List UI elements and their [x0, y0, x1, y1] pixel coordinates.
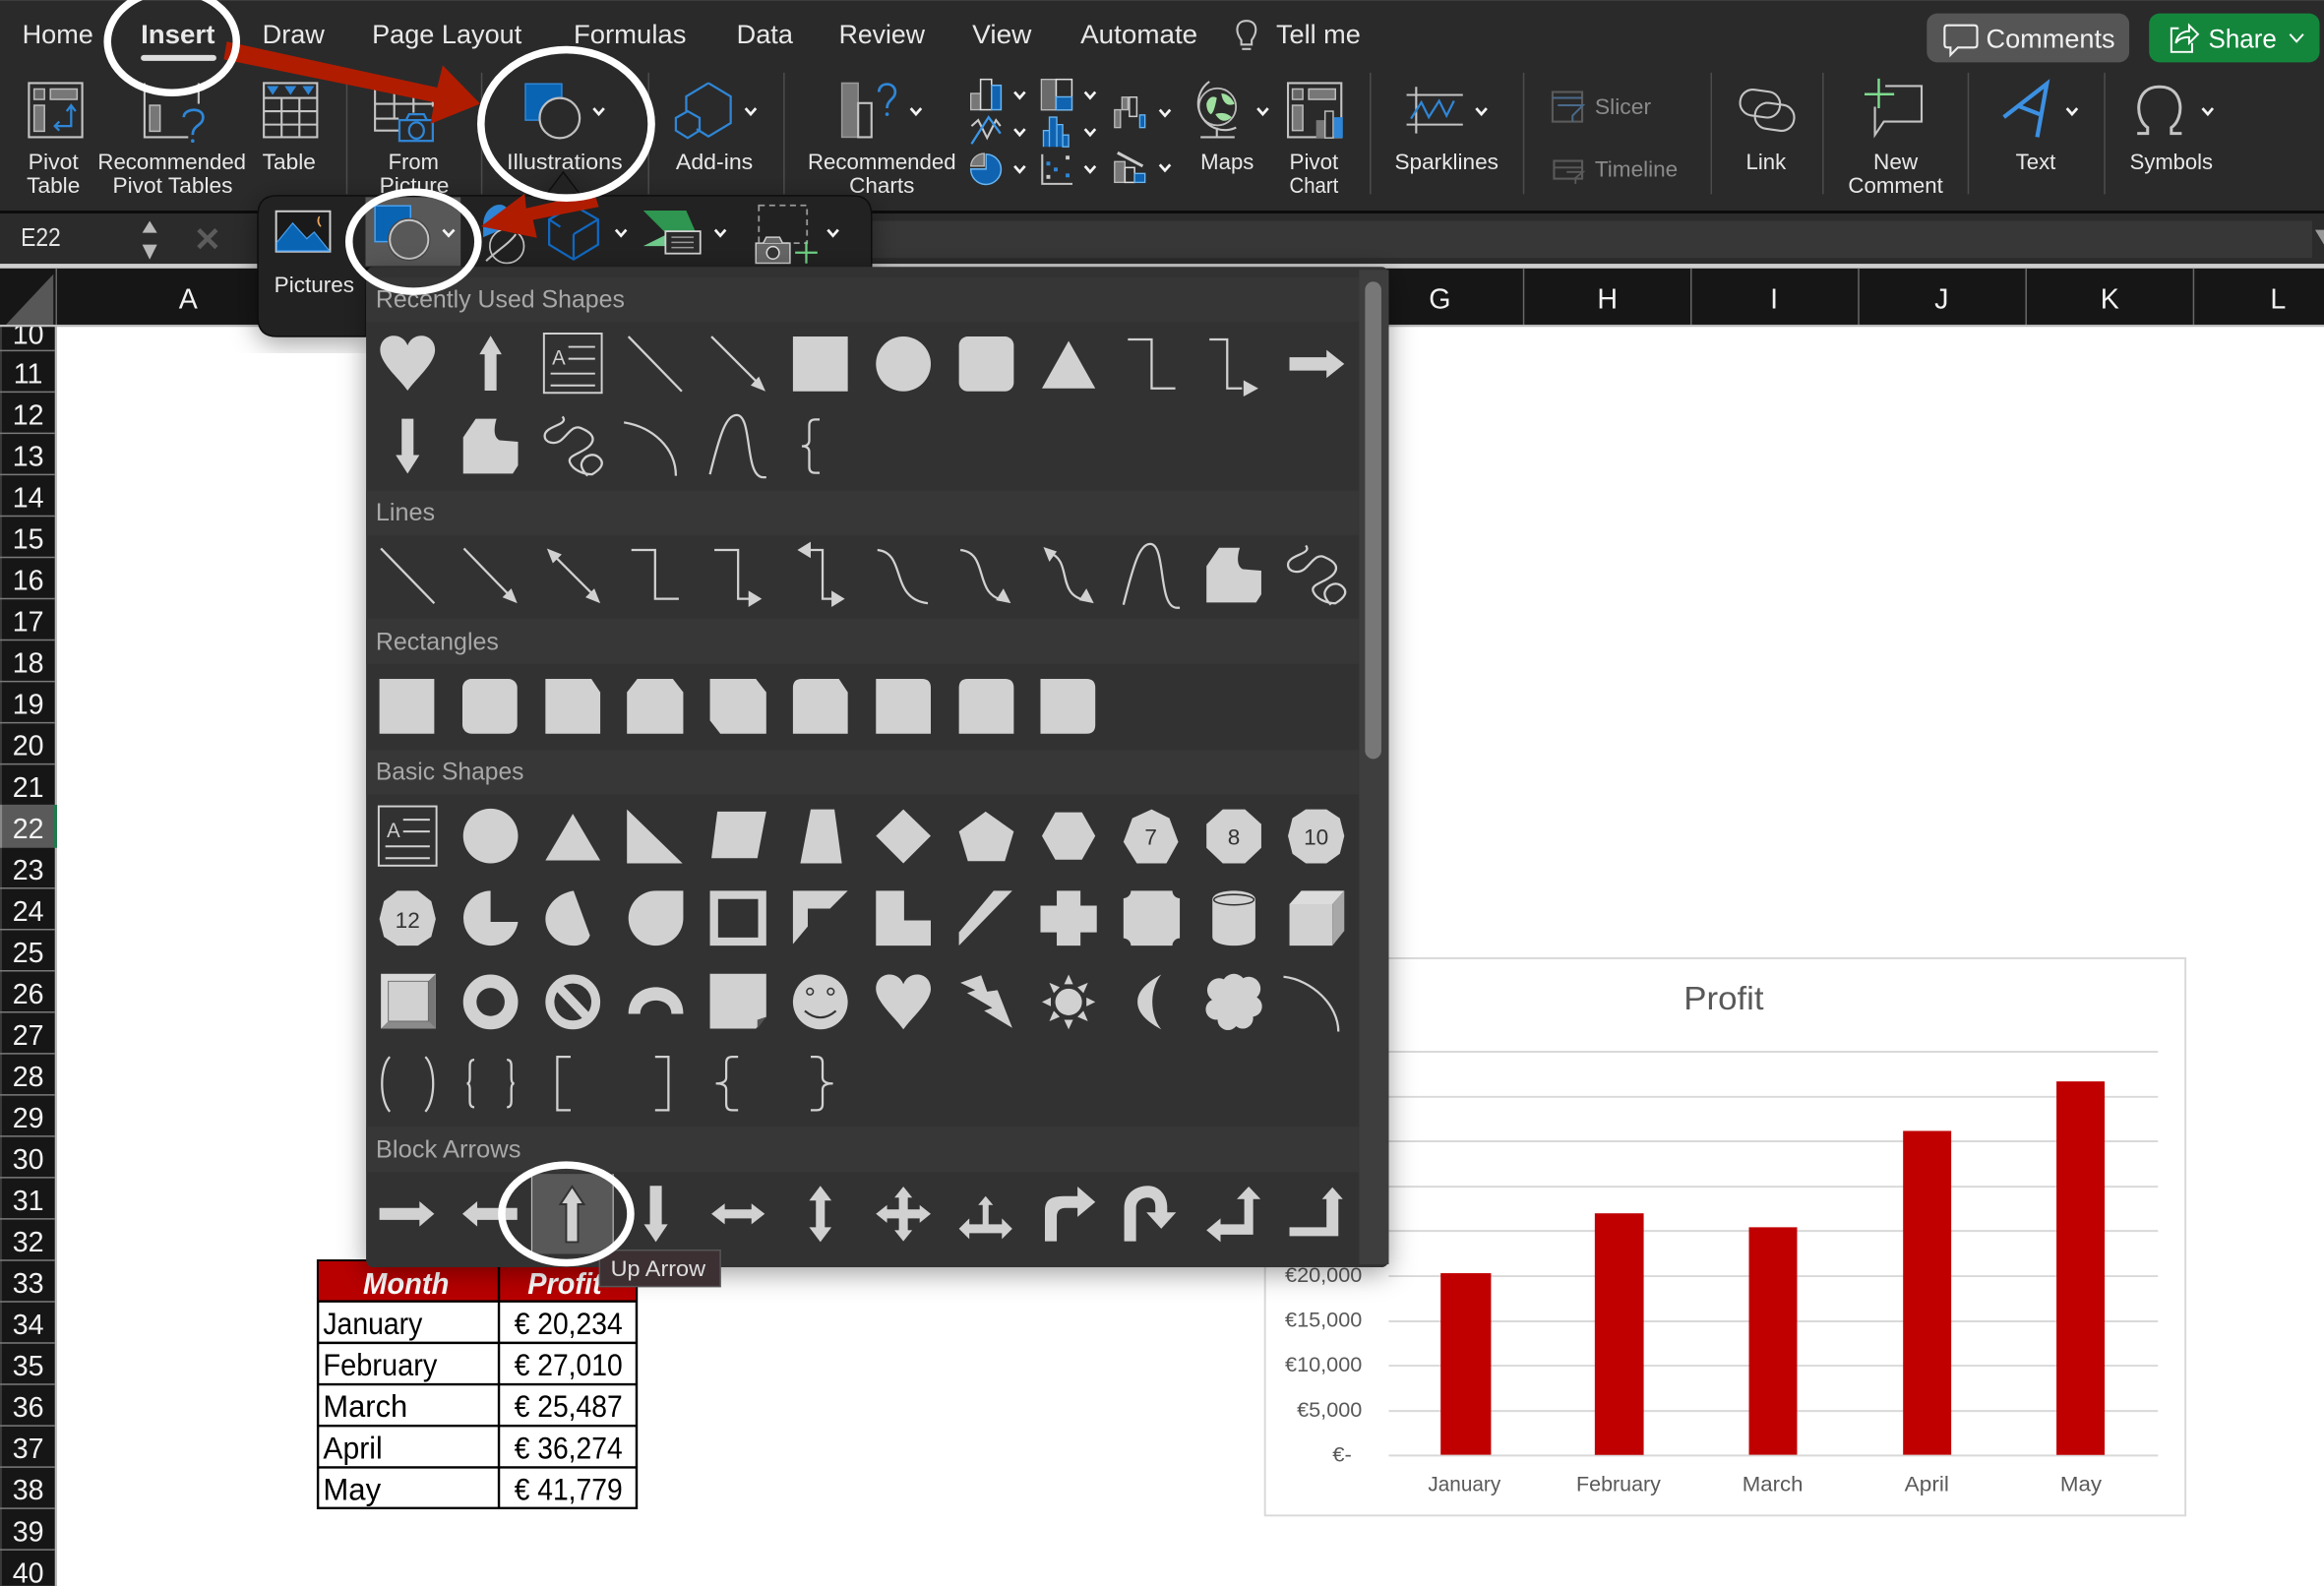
- column header row: G: [1429, 283, 1451, 315]
- row number header: 20: [13, 731, 44, 762]
- callout ring: insert tab: [107, 0, 236, 92]
- comments button: Comments: [1987, 23, 2115, 53]
- label: new comment: [1848, 150, 1943, 198]
- row number header: 29: [13, 1103, 44, 1134]
- callout ring: illustrations: [481, 50, 651, 198]
- icon: link: [1739, 88, 1796, 133]
- y-axis labels: €10,000: [1285, 1354, 1362, 1376]
- shape row: basic 1: 7: [1144, 825, 1157, 850]
- row number header: 34: [13, 1310, 44, 1341]
- heading: block arrows: Block Arrows: [376, 1137, 520, 1164]
- label: from picture: Picture: [380, 173, 449, 198]
- shape row: basic 1: A: [387, 820, 401, 842]
- icon: table: [264, 83, 317, 137]
- label: pivot chart: Chart: [1290, 173, 1338, 198]
- row number header: 23: [13, 855, 44, 886]
- data table: month and profit: Month: [363, 1268, 449, 1301]
- label: new comment: New: [1873, 150, 1918, 174]
- row number header: 35: [13, 1351, 44, 1382]
- data table: month and profit: € 27,010: [515, 1347, 623, 1382]
- share button: [2149, 14, 2319, 62]
- label: text: Text: [2016, 150, 2055, 174]
- row number header: 15: [13, 524, 44, 556]
- column header row: [0, 269, 2324, 327]
- ribbon tabs: Insert: [141, 20, 215, 49]
- label: pivot table: Table: [27, 173, 80, 198]
- chart title: Profit: [1683, 981, 1764, 1017]
- icon and label: timeline: Timeline: [1595, 156, 1678, 181]
- row number header: 28: [13, 1062, 44, 1093]
- row number header: 13: [13, 442, 44, 473]
- label: pivot chart: Pivot: [1290, 150, 1338, 174]
- shape row: basic 1: 10: [1304, 825, 1328, 850]
- icon: 3D models: [549, 206, 626, 260]
- row number header: 36: [13, 1392, 44, 1424]
- heading: basic shapes: Basic Shapes: [376, 759, 524, 785]
- shape row: basic 1: 8: [1228, 825, 1240, 850]
- row number header: 10: [13, 320, 44, 351]
- column header row: A: [179, 283, 199, 315]
- ribbon tabs: Review: [839, 20, 926, 49]
- y-axis labels: €5,000: [1297, 1399, 1362, 1422]
- shape row: basic 2: [380, 890, 1344, 946]
- row number header: 33: [13, 1268, 44, 1300]
- waterfall chart icon: [1115, 97, 1145, 128]
- x-axis labels: May: [2060, 1474, 2103, 1496]
- icon and label: timeline: [1554, 156, 1678, 184]
- formula bar: [0, 211, 2324, 269]
- icon: sparklines: [1407, 87, 1487, 134]
- comments button: [1926, 14, 2129, 62]
- callout ring: shapes button: [349, 192, 478, 291]
- line chart icon: [971, 117, 1001, 144]
- label: pivot table: [27, 150, 80, 198]
- label: recommended charts: Charts: [849, 173, 915, 198]
- row number header: 18: [13, 648, 44, 680]
- column header row: I: [1770, 283, 1778, 315]
- icon: screenshot: [756, 206, 838, 264]
- label: recommended charts: [808, 150, 956, 198]
- row number header: 30: [13, 1144, 44, 1176]
- tooltip: up arrow: Up Arrow: [611, 1256, 706, 1281]
- label: from picture: From: [389, 150, 439, 174]
- data table: month and profit: € 25,487: [515, 1388, 623, 1424]
- label: sparklines: Sparklines: [1395, 150, 1498, 174]
- y-axis labels: €20,000: [1285, 1264, 1362, 1287]
- column header row: H: [1597, 283, 1618, 315]
- icon: from picture: [375, 89, 433, 141]
- x-axis labels: April: [1905, 1474, 1949, 1496]
- x-axis labels: February: [1576, 1474, 1661, 1496]
- stacked chart icon: [1041, 80, 1071, 110]
- ribbon tabs: Data: [737, 20, 793, 49]
- heading: rectangles: Rectangles: [376, 630, 499, 656]
- share button: Share: [2209, 23, 2277, 53]
- data table: month and profit: May: [323, 1472, 381, 1507]
- icon: text: [2004, 84, 2077, 137]
- label: link: Link: [1746, 150, 1786, 174]
- column header row: K: [2101, 283, 2119, 315]
- row number header: 12: [13, 400, 44, 432]
- histogram icon: [1043, 117, 1069, 147]
- y-axis labels: €-: [1332, 1443, 1352, 1466]
- icon group: chart types: [971, 80, 1170, 184]
- label: recommended pivot tables: Pivot Tables: [112, 173, 233, 198]
- shape row: block arrows: [380, 1186, 1343, 1242]
- pie chart icon: [971, 153, 1001, 184]
- heading: recently used shapes: Recently Used Shapes: [376, 287, 625, 314]
- data table: month and profit: € 20,234: [515, 1306, 623, 1341]
- label: recommended pivot tables: [97, 150, 246, 198]
- red arrow: illustrations to shapes: [481, 193, 599, 238]
- label: pivot chart: [1290, 150, 1338, 198]
- heading: lines: Lines: [376, 500, 435, 526]
- chart bars: [1440, 1081, 2105, 1455]
- row number header: 21: [13, 772, 44, 804]
- icon: symbols: [2137, 87, 2213, 134]
- shape row: basic 3: [381, 974, 1338, 1032]
- row number header: 14: [13, 483, 44, 515]
- icon: new comment: [1865, 79, 1922, 135]
- gallery scrollbar: [1365, 281, 1381, 759]
- ribbon tabs: View: [972, 20, 1032, 49]
- icon: add-ins: [676, 83, 756, 138]
- icon: illustrations: [525, 84, 604, 138]
- label: add-ins: Add-ins: [676, 150, 753, 174]
- ribbon tabs: Formulas: [574, 20, 686, 49]
- illustrations dropdown toolbar: [258, 172, 872, 336]
- data table: month and profit: February: [323, 1347, 438, 1382]
- row number header: 31: [13, 1186, 44, 1217]
- icon: pivot chart: [1288, 83, 1343, 138]
- label: maps: Maps: [1200, 150, 1254, 174]
- x-axis labels: January: [1428, 1474, 1501, 1496]
- row number header: 22: [13, 814, 44, 845]
- icon: smartart: [643, 211, 725, 254]
- name box E22: E22: [21, 224, 61, 252]
- icon: shapes button highlighted: [365, 197, 460, 266]
- highlighted up arrow shape: [531, 1174, 613, 1253]
- icon and label: slicer: [1553, 92, 1651, 122]
- row number header: 19: [13, 690, 44, 721]
- icon: icons button: [483, 205, 524, 263]
- ribbon tabs: Automate: [1080, 20, 1197, 49]
- bar chart: profit by month: [1265, 958, 2185, 1515]
- callout ring: up arrow: [502, 1165, 631, 1263]
- shapes gallery panel: [366, 267, 1388, 1267]
- icon: recommended charts: [842, 83, 921, 137]
- y-axis labels: [1285, 1264, 1362, 1466]
- data table: month and profit: March: [323, 1388, 407, 1424]
- label: recommended pivot tables: Recommended: [97, 150, 246, 174]
- label: pivot table: Pivot: [29, 150, 79, 174]
- row number header: 38: [13, 1475, 44, 1506]
- label: table: Table: [263, 150, 316, 174]
- ribbon group separators: [346, 73, 2105, 194]
- ribbon tabs: Home: [23, 20, 93, 49]
- ribbon tabs: [23, 20, 1361, 61]
- shape row: recently used: [380, 334, 1344, 477]
- data table: month and profit: [317, 1260, 638, 1509]
- icon: maps globe: [1198, 82, 1268, 137]
- icon: recommended pivot tables: [145, 83, 203, 143]
- ribbon tabs: Page Layout: [372, 20, 522, 49]
- row number header: [0, 320, 57, 1586]
- label: illustrations: Illustrations: [507, 150, 623, 174]
- data table: month and profit: Profit: [527, 1268, 603, 1301]
- ribbon tabs: Tell me: [1276, 20, 1361, 49]
- shape row: basic 2: 12: [396, 908, 420, 933]
- row number header: 11: [14, 358, 42, 390]
- column header row: L: [2270, 283, 2286, 315]
- row number header: 26: [13, 979, 44, 1010]
- icon and label: slicer: Slicer: [1595, 94, 1651, 119]
- label: symbols: Symbols: [2130, 150, 2213, 174]
- box plot icon: [1115, 152, 1145, 182]
- column chart icon: [971, 80, 1001, 110]
- row number header: 32: [13, 1227, 44, 1258]
- x-axis labels: March: [1743, 1474, 1804, 1496]
- data table: month and profit: € 36,274: [515, 1430, 623, 1465]
- red arrow: insert to illustrations: [223, 41, 480, 124]
- row number header: 27: [13, 1020, 44, 1052]
- shape row: basic 4 brackets: [382, 1057, 833, 1112]
- label: recommended charts: Recommended: [808, 150, 956, 174]
- shape row: basic 1: [379, 807, 1344, 866]
- row number header: 37: [13, 1434, 44, 1465]
- icon: pivot table: [29, 83, 83, 137]
- label: new comment: Comment: [1848, 173, 1943, 198]
- shape row: rectangles: [380, 679, 1095, 734]
- column header row: J: [1934, 283, 1949, 315]
- row number header: 39: [13, 1516, 44, 1548]
- tooltip: up arrow: [599, 1250, 720, 1287]
- label: pictures: Pictures: [275, 273, 354, 297]
- row number header: 25: [13, 938, 44, 969]
- shape row: recently used: A: [552, 347, 567, 370]
- data table: month and profit: € 41,779: [515, 1472, 623, 1507]
- row number header: 24: [13, 896, 44, 928]
- data table: month and profit: April: [323, 1430, 383, 1465]
- row number header: 17: [13, 607, 44, 639]
- ribbon tabs: Draw: [263, 20, 326, 49]
- shape row: lines: [381, 542, 1345, 608]
- y-axis labels: €15,000: [1285, 1309, 1362, 1331]
- x-axis labels: [1428, 1474, 2103, 1496]
- ribbon background: [0, 0, 2324, 211]
- scatter chart icon: [1042, 154, 1072, 184]
- icon: pictures: [276, 212, 330, 252]
- row number header: 16: [13, 566, 44, 597]
- data table: month and profit: January: [323, 1306, 422, 1341]
- label: from picture: [380, 150, 449, 198]
